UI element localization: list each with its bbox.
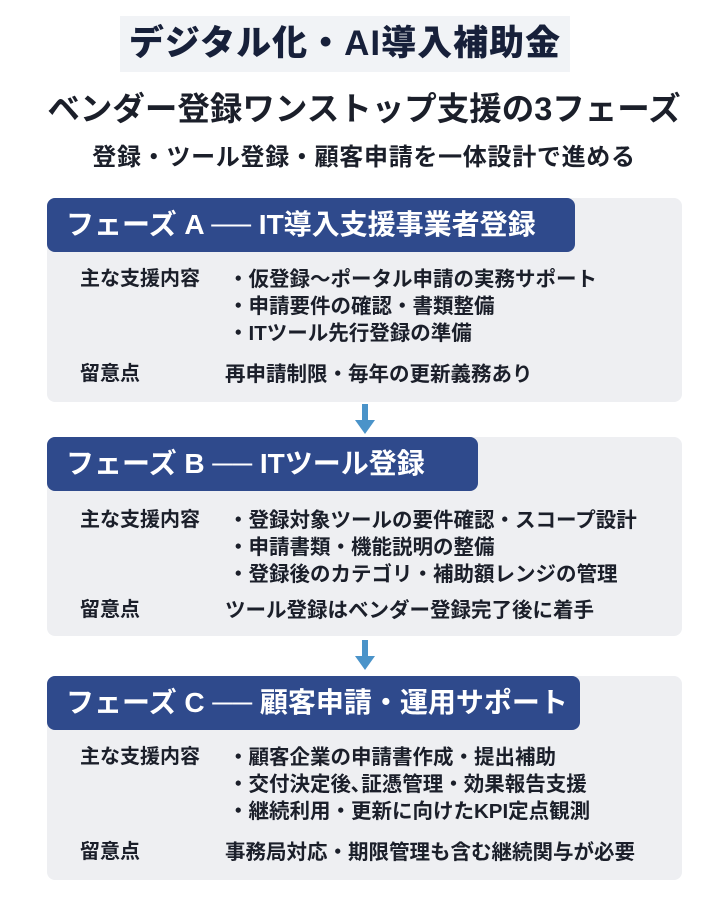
- notes C: 事務局対応・期限管理も含む継続関与が必要: [225, 841, 635, 864]
- bullets B: ・申請書類・機能説明の整備: [228, 536, 494, 559]
- header A: [47, 198, 575, 252]
- header A: フェーズ A ── IT導入支援事業者登録: [66, 209, 536, 240]
- arrow A to B: [355, 404, 375, 434]
- bullets C: [228, 746, 590, 823]
- bullets B: ・登録後のカテゴリ・補助額レンジの管理: [228, 563, 618, 586]
- bullets B: [228, 509, 637, 586]
- subheading: 登録・ツール登録・顧客申請を一体設計で進める: [92, 144, 636, 171]
- bullets A: ・仮登録〜ポータル申請の実務サポート: [228, 268, 597, 291]
- bullets A: ・ITツール先行登録の準備: [228, 322, 472, 345]
- notes B: ツール登録はベンダー登録完了後に着手: [225, 599, 594, 622]
- label: support C: 主な支援内容: [80, 746, 200, 768]
- label: support A: 主な支援内容: [80, 268, 200, 290]
- bullets A: [228, 268, 597, 345]
- label: notes A: 留意点: [80, 363, 140, 385]
- label: notes B: 留意点: [80, 599, 140, 621]
- heading: ベンダー登録ワンストップ支援の3フェーズ: [47, 91, 681, 127]
- bullets C: ・交付決定後､証憑管理・効果報告支援: [228, 773, 587, 796]
- panel: phase C: [47, 676, 682, 880]
- header C: フェーズ C ── 顧客申請・運用サポート: [66, 687, 568, 718]
- label: support B: 主な支援内容: [80, 509, 200, 531]
- panel: phase A: [47, 198, 682, 402]
- label: notes C: 留意点: [80, 841, 140, 863]
- header B: [47, 437, 478, 491]
- bullets B: ・登録対象ツールの要件確認・スコープ設計: [228, 509, 637, 532]
- panel: phase B: [47, 437, 682, 636]
- title: デジタル化・AI導入補助金: [129, 24, 561, 63]
- bullets C: ・継続利用・更新に向けたKPI定点観測: [228, 800, 590, 823]
- header C: [47, 676, 580, 730]
- title: [120, 16, 570, 72]
- bullets A: ・申請要件の確認・書類整備: [228, 295, 494, 318]
- bullets C: ・顧客企業の申請書作成・提出補助: [228, 746, 556, 769]
- header B: フェーズ B ── ITツール登録: [66, 448, 425, 479]
- notes A: 再申請制限・毎年の更新義務あり: [225, 363, 532, 386]
- arrow B to C: [355, 640, 375, 670]
